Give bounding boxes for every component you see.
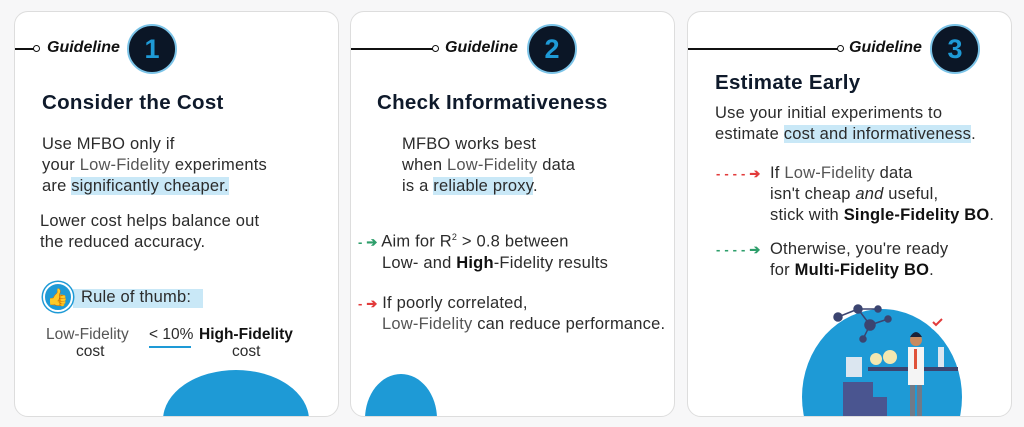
bullet: multi fidelity: - - - - ➔ (716, 242, 760, 257)
header: guideline 2 (351, 24, 577, 74)
header: guideline 1 (15, 24, 177, 74)
bullet: multi fidelity: Otherwise, you're ready (770, 240, 948, 258)
text block: Use your initial experiments to (715, 104, 942, 122)
bullet: multi fidelity: for Multi-Fidelity BO. (770, 261, 934, 279)
header: guideline 1: Guideline (47, 39, 120, 56)
header: guideline 1: 1 (144, 34, 160, 64)
bullet: single fidelity (716, 164, 994, 224)
text block: are significantly cheaper. (42, 177, 229, 195)
text block (402, 135, 575, 195)
text block: lower cost: the reduced accuracy. (40, 233, 205, 251)
rule of thumb (42, 280, 203, 314)
bullet: single fidelity: - - - - ➔ (716, 166, 760, 181)
bullet: single fidelity: isn't cheap and useful, (770, 185, 938, 203)
panel: guideline 2 (350, 11, 675, 417)
panel: guideline 3 (687, 11, 1012, 417)
text block (42, 135, 267, 195)
formula (46, 326, 293, 360)
title: Estimate Early (715, 71, 860, 94)
title: Check Informativeness (377, 91, 608, 114)
text block: your Low-Fidelity experiments (42, 156, 267, 174)
panel: guideline 1 (14, 11, 339, 417)
icon: thumbs up (43, 282, 73, 312)
text block: lower cost: Lower cost helps balance out (40, 212, 259, 230)
header: guideline 3: Guideline (849, 39, 922, 56)
header: guideline 3: 3 (947, 34, 963, 64)
rule of thumb: Rule of thumb: (81, 288, 191, 306)
bullet: single fidelity: stick with Single-Fidelity BO. (770, 206, 994, 224)
text block: MFBO works best (402, 135, 536, 153)
bullet: poorly correlated (358, 294, 665, 333)
bullet: poorly correlated: - ➔ If poorly correlated, (358, 294, 528, 312)
title: Consider the Cost (42, 91, 224, 114)
bullet: aim: - ➔ Aim for R2 > 0.8 between (358, 232, 569, 250)
formula: High-Fidelity (199, 326, 293, 343)
decorative blob (163, 370, 309, 427)
formula: cost (76, 343, 104, 360)
illustration: scientist in lab (802, 304, 962, 416)
text block: is a reliable proxy. (402, 177, 538, 195)
text block (715, 104, 976, 143)
bullet: aim (358, 232, 608, 272)
formula: Low-Fidelity (46, 326, 129, 343)
text block: Use MFBO only if (42, 135, 174, 153)
bullet: multi fidelity (716, 240, 948, 279)
header: guideline 3 (688, 24, 980, 74)
text block: when Low-Fidelity data (402, 156, 575, 174)
formula: cost (232, 343, 260, 360)
text block: lower cost (40, 212, 259, 251)
bullet: poorly correlated: Low-Fidelity can reduce performance. (382, 315, 665, 333)
decorative blob (365, 374, 437, 427)
formula: < 10% (149, 326, 193, 343)
icon: thumbs up: 👍 (47, 288, 69, 307)
header: guideline 2: Guideline (445, 39, 518, 56)
text block: estimate cost and informativeness. (715, 125, 976, 143)
header: guideline 2: 2 (544, 34, 560, 64)
bullet: aim: Low- and High-Fidelity results (382, 254, 608, 272)
bullet: single fidelity: If Low-Fidelity data (770, 164, 912, 182)
